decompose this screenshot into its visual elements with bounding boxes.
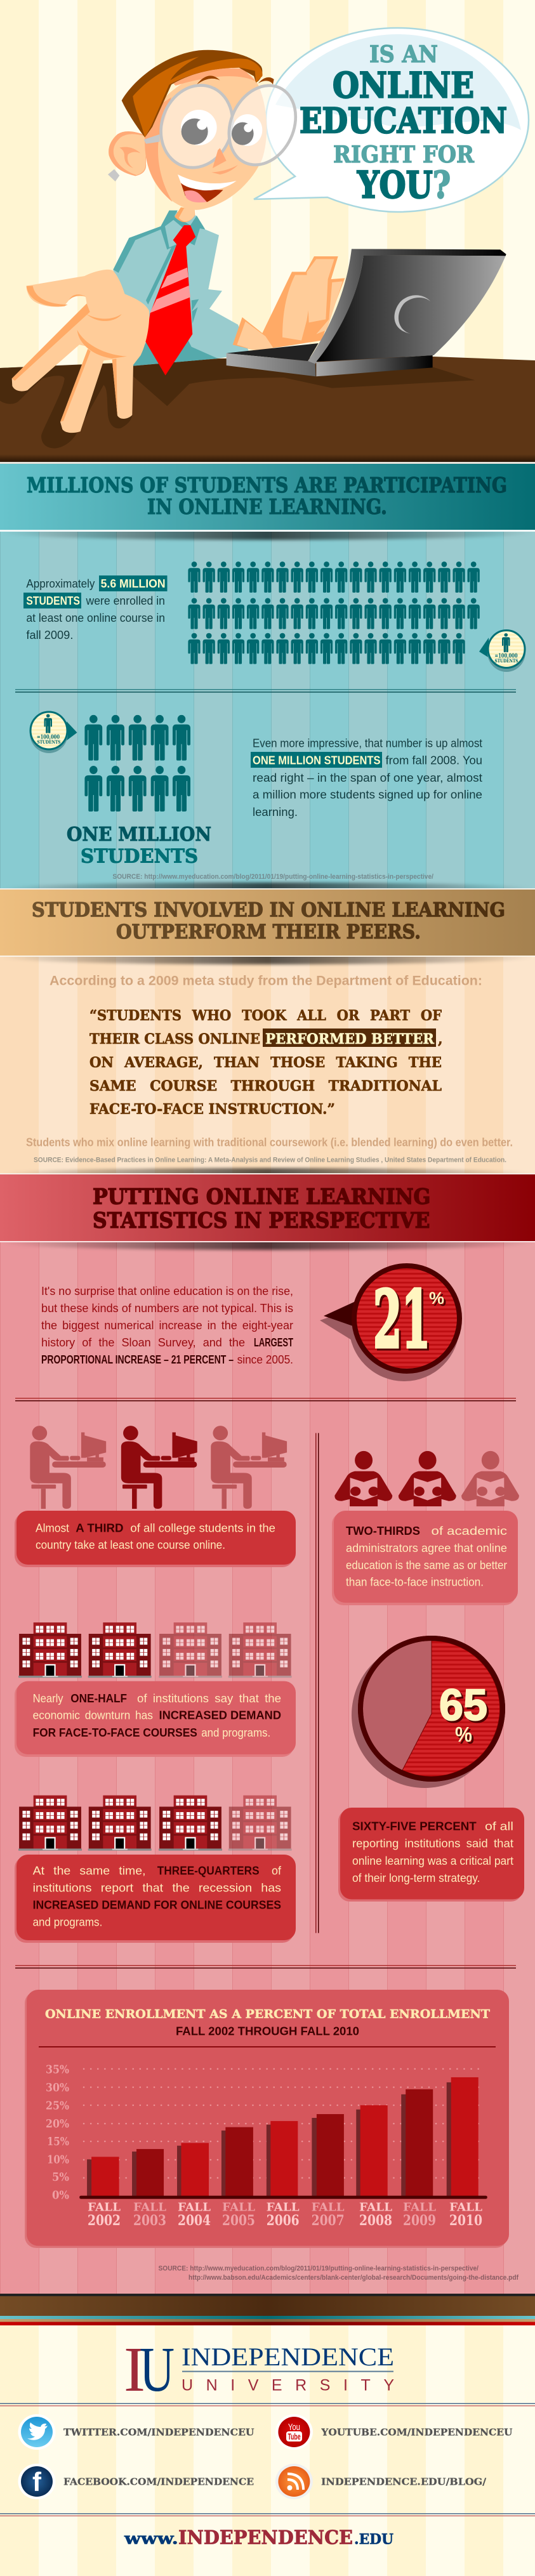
desk xyxy=(0,357,535,464)
y axis labels: 5% xyxy=(52,2171,69,2184)
title: YOU? xyxy=(357,164,451,207)
panel: teal section background xyxy=(0,532,535,888)
logo: INDEPENDENCE xyxy=(182,2343,394,2371)
panel: sixty-five percent: online learning was a critical part xyxy=(352,1855,513,1867)
icon: youtube: Tube xyxy=(288,2431,301,2441)
y axis labels: 35% xyxy=(46,2063,69,2076)
y axis labels: 25% xyxy=(46,2100,69,2113)
panel: three-quarters: and programs. xyxy=(33,1916,102,1929)
desk shadows xyxy=(0,357,475,449)
panel: three-quarters: institutions report that the recession has xyxy=(33,1882,281,1895)
section shadow xyxy=(0,526,534,540)
panel: two-thirds: TWO-THIRDS xyxy=(346,1525,420,1537)
pie chart: 65 percent xyxy=(352,1638,503,1788)
icon grid: 5.6 million people xyxy=(188,562,480,664)
panel: three-quarters: THREE-QUARTERS xyxy=(157,1865,260,1877)
x axis labels: FALL xyxy=(449,2200,482,2214)
quote xyxy=(89,1008,443,1118)
icons: buildings three-quarters xyxy=(18,1796,292,1851)
text: 5.6 million students: STUDENTS xyxy=(26,595,80,607)
icons: buildings one-half xyxy=(18,1622,292,1678)
text: 5.6 million students: fall 2009. xyxy=(26,629,73,641)
x axis labels: FALL xyxy=(403,2200,436,2214)
x axis labels: 2007 xyxy=(312,2212,345,2229)
icons: three students at computers xyxy=(30,1426,287,1509)
x axis labels: 2008 xyxy=(359,2212,392,2229)
text: even more impressive: learning. xyxy=(253,806,298,818)
source lines xyxy=(159,2264,518,2282)
badge: 100,000 students right: STUDENTS xyxy=(495,658,518,664)
badge: 100,000 students right: =100,000 xyxy=(495,654,518,660)
text: even more impressive: a million more students signed up for online xyxy=(253,789,482,801)
title: EDUCATION xyxy=(300,100,507,141)
panel: sixty-five percent: of all xyxy=(485,1820,513,1833)
head xyxy=(108,50,308,222)
intro text: According to a 2009 meta study from the Department of Education: xyxy=(50,974,482,989)
badge: 21 percent xyxy=(320,1266,459,1381)
quote: PERFORMED BETTER xyxy=(265,1031,435,1048)
x axis labels: FALL xyxy=(88,2200,121,2214)
badge: 21 percent: % xyxy=(429,1289,444,1308)
heading: statistics in perspective: STATISTICS IN PERSPECTIVE xyxy=(93,1208,430,1233)
x axis labels xyxy=(88,2200,482,2229)
badge: 100,000 students left: =100,000 xyxy=(37,735,60,741)
text: 5.6 million students: Approximately xyxy=(26,577,95,590)
typing hand xyxy=(233,256,345,350)
website url: .EDU xyxy=(354,2532,393,2548)
heading: outperform xyxy=(0,888,535,957)
text: even more impressive xyxy=(251,737,482,818)
speech bubble xyxy=(254,28,529,212)
icons: three readers xyxy=(334,1451,519,1506)
y axis labels: 0% xyxy=(52,2189,69,2202)
x axis labels: 2009 xyxy=(403,2212,436,2229)
quote: , xyxy=(438,1031,443,1048)
icon: youtube xyxy=(275,2414,313,2450)
text: no surprise xyxy=(41,1285,293,1366)
panel: a third: country take at least one course online. xyxy=(36,1539,225,1551)
heading: outperform: STUDENTS INVOLVED IN ONLINE LEARNING xyxy=(32,899,505,922)
logo: UNIVERSITY xyxy=(182,2376,394,2394)
panel: one-half: ONE-HALF xyxy=(70,1692,127,1705)
text: twitter: TWITTER.COM/INDEPENDENCEU xyxy=(63,2426,254,2438)
logo xyxy=(124,2334,394,2405)
panel: footer xyxy=(0,2325,535,2576)
shirt and tie xyxy=(113,211,249,376)
x axis labels: 2010 xyxy=(449,2212,482,2229)
panel: two-thirds: than face-to-face instruction. xyxy=(346,1576,484,1589)
text: no surprise: history of the Sloan Survey, and the xyxy=(41,1336,245,1349)
colour bands xyxy=(0,2294,535,2325)
panel: two-thirds: of academic xyxy=(432,1525,507,1537)
heading: statistics in perspective: PUTTING ONLINE LEARNING xyxy=(93,1184,430,1209)
panel: one-half: INCREASED DEMAND xyxy=(159,1709,281,1722)
panel: one-half: of institutions say that the xyxy=(137,1692,281,1705)
text: youtube: YOUTUBE.COM/INDEPENDENCEU xyxy=(320,2426,512,2438)
panel: pink section background xyxy=(0,1242,535,2294)
x axis labels: FALL xyxy=(312,2200,345,2214)
panel: three-quarters: of xyxy=(272,1865,282,1877)
panel: three-quarters: INCREASED DEMAND FOR ONLINE COURSES xyxy=(33,1898,281,1911)
text: 5.6 million students: at least one online course in xyxy=(26,612,165,624)
badge: 100,000 students right xyxy=(479,631,525,672)
x axis labels: 2006 xyxy=(267,2212,300,2229)
text: no surprise: LARGEST xyxy=(254,1336,293,1349)
heading: millions of students: IN ONLINE LEARNING. xyxy=(147,494,387,519)
text: blog: INDEPENDENCE.EDU/BLOG/ xyxy=(321,2476,487,2487)
website url: INDEPENDENCE xyxy=(178,2527,353,2549)
panel: sixty-five percent: of their long-term strategy. xyxy=(352,1872,480,1884)
heading: millions of students xyxy=(0,464,535,532)
text: no surprise: the biggest numerical increase in the eight-year xyxy=(41,1319,293,1332)
panel: two-thirds: education is the same as or better xyxy=(346,1559,507,1572)
x axis labels: FALL xyxy=(359,2200,392,2214)
panel: sixty-five percent: reporting institutions said that xyxy=(352,1837,513,1850)
text: no surprise: but these kinds of numbers are not typical. This is xyxy=(41,1302,293,1315)
x axis labels: FALL xyxy=(267,2200,300,2214)
text: no surprise: PROPORTIONAL INCREASE – 21 PERCENT – xyxy=(41,1353,234,1366)
quote: “STUDENTS WHO TOOK ALL OR PART OF xyxy=(89,1008,442,1024)
logo: U xyxy=(140,2334,175,2405)
panel: a third xyxy=(15,1511,296,1567)
badge: 100,000 students left: STUDENTS xyxy=(37,739,61,745)
badge: 100,000 students left xyxy=(30,712,77,753)
x axis labels: 2004 xyxy=(178,2212,211,2229)
quote: ON AVERAGE, THAN THOSE TAKING THE xyxy=(89,1055,442,1071)
pie chart: 65 percent: % xyxy=(455,1723,472,1746)
source line: SOURCE: Evidence-Based Practices in Online Learning: A Meta-Analysis and Review of Online Learning Studies , United States Department of Education. xyxy=(34,1157,506,1164)
panel: two-thirds: administrators agree that online xyxy=(346,1542,507,1554)
x axis labels: 2003 xyxy=(133,2212,166,2229)
icon: youtube: You xyxy=(288,2422,300,2433)
panel: one-half: and programs. xyxy=(201,1726,270,1739)
quote: SAME COURSE THROUGH TRADITIONAL xyxy=(89,1078,442,1094)
panel: enrollment bar chart xyxy=(25,1990,509,2248)
heading: statistics in perspective xyxy=(0,1173,535,1242)
label: one million students: ONE MILLION xyxy=(67,824,211,846)
laptop xyxy=(227,249,506,376)
character xyxy=(12,50,345,433)
text: 5.6 million students xyxy=(23,575,168,641)
logo: I xyxy=(124,2334,145,2405)
panel: one-half xyxy=(15,1681,296,1757)
panel: one-half: FOR FACE-TO-FACE COURSES xyxy=(33,1726,197,1739)
text: 5.6 million students: were enrolled in xyxy=(86,595,165,607)
text: 5.6 million students: 5.6 MILLION xyxy=(101,577,166,590)
y axis labels: 15% xyxy=(47,2135,69,2148)
icon: rss xyxy=(275,2464,313,2499)
panel: two-thirds xyxy=(332,1511,518,1605)
panel: three-quarters xyxy=(15,1855,296,1943)
panel: one-half: economic downturn has xyxy=(33,1709,153,1722)
icon: twitter xyxy=(18,2414,56,2450)
x axis labels: FALL xyxy=(133,2200,166,2214)
x axis labels: 2005 xyxy=(222,2212,255,2229)
title: ONLINE xyxy=(333,64,474,105)
pointing hand xyxy=(12,270,149,433)
panel: a third: of all college students in the xyxy=(130,1521,275,1534)
y axis labels: 30% xyxy=(46,2081,69,2094)
icon grid: one million people xyxy=(84,715,190,812)
badge: 21 percent: 21 xyxy=(373,1274,430,1366)
quote: FACE-TO-FACE INSTRUCTION.” xyxy=(89,1101,335,1118)
x axis labels: FALL xyxy=(178,2200,211,2214)
panel: one-half: Nearly xyxy=(33,1692,63,1705)
bars xyxy=(79,2077,487,2199)
source line: SOURCE: http://www.myeducation.com/blog/2011/01/19/putting-online-learning-statistics-in-perspective/ xyxy=(112,873,433,881)
text: even more impressive: ONE MILLION STUDENTS xyxy=(253,754,381,766)
text: even more impressive: from fall 2008. You xyxy=(386,754,482,766)
title: RIGHT FOR xyxy=(333,141,475,168)
x axis labels: FALL xyxy=(222,2200,255,2214)
label: one million students: STUDENTS xyxy=(81,846,198,868)
panel: sixty-five percent: SIXTY-FIVE PERCENT xyxy=(352,1820,477,1833)
y axis labels: 10% xyxy=(47,2153,69,2166)
text: even more impressive: read right – in the span of one year, almost xyxy=(253,772,482,784)
text: facebook: FACEBOOK.COM/INDEPENDENCE xyxy=(63,2476,254,2487)
x axis labels: 2002 xyxy=(88,2212,121,2229)
panel: sixty-five percent xyxy=(338,1808,524,1902)
icon: facebook: f xyxy=(32,2467,42,2497)
label: one million students xyxy=(67,824,211,868)
title xyxy=(300,41,507,207)
panel: a third: A THIRD xyxy=(76,1521,124,1534)
website url: www. xyxy=(124,2530,178,2548)
chart title: ONLINE ENROLLMENT AS A PERCENT OF TOTAL ENROLLMENT xyxy=(45,2008,490,2021)
quote: THEIR CLASS ONLINE xyxy=(89,1031,260,1048)
gridlines xyxy=(84,2069,484,2178)
text: no surprise: It's no surprise that online education is on the rise, xyxy=(41,1285,293,1298)
panel: hero xyxy=(0,0,535,464)
text: even more impressive: Even more impressive, that number is up almost xyxy=(253,737,482,750)
source lines: SOURCE: http://www.myeducation.com/blog/2011/01/19/putting-online-learning-statistics-in-perspective/ xyxy=(159,2264,479,2272)
source lines: http://www.babson.edu/Academics/centers/blank-center/global-research/Documents/going-the-distance.pdf xyxy=(188,2274,518,2282)
icon: facebook xyxy=(18,2464,56,2499)
panel: a third: Almost xyxy=(36,1521,69,1534)
panel: cream section background xyxy=(0,956,535,1174)
chart subtitle: FALL 2002 THROUGH FALL 2010 xyxy=(176,2025,359,2038)
text: no surprise: since 2005. xyxy=(237,1353,293,1366)
heading: outperform: OUTPERFORM THEIR PEERS. xyxy=(116,921,421,943)
y axis labels: 20% xyxy=(46,2117,69,2131)
title: IS AN xyxy=(369,41,438,68)
panel: three-quarters: At the same time, xyxy=(33,1865,146,1877)
y axis labels xyxy=(46,2063,69,2202)
pie chart: 65 percent: 65 xyxy=(439,1680,487,1730)
website url xyxy=(124,2527,393,2549)
